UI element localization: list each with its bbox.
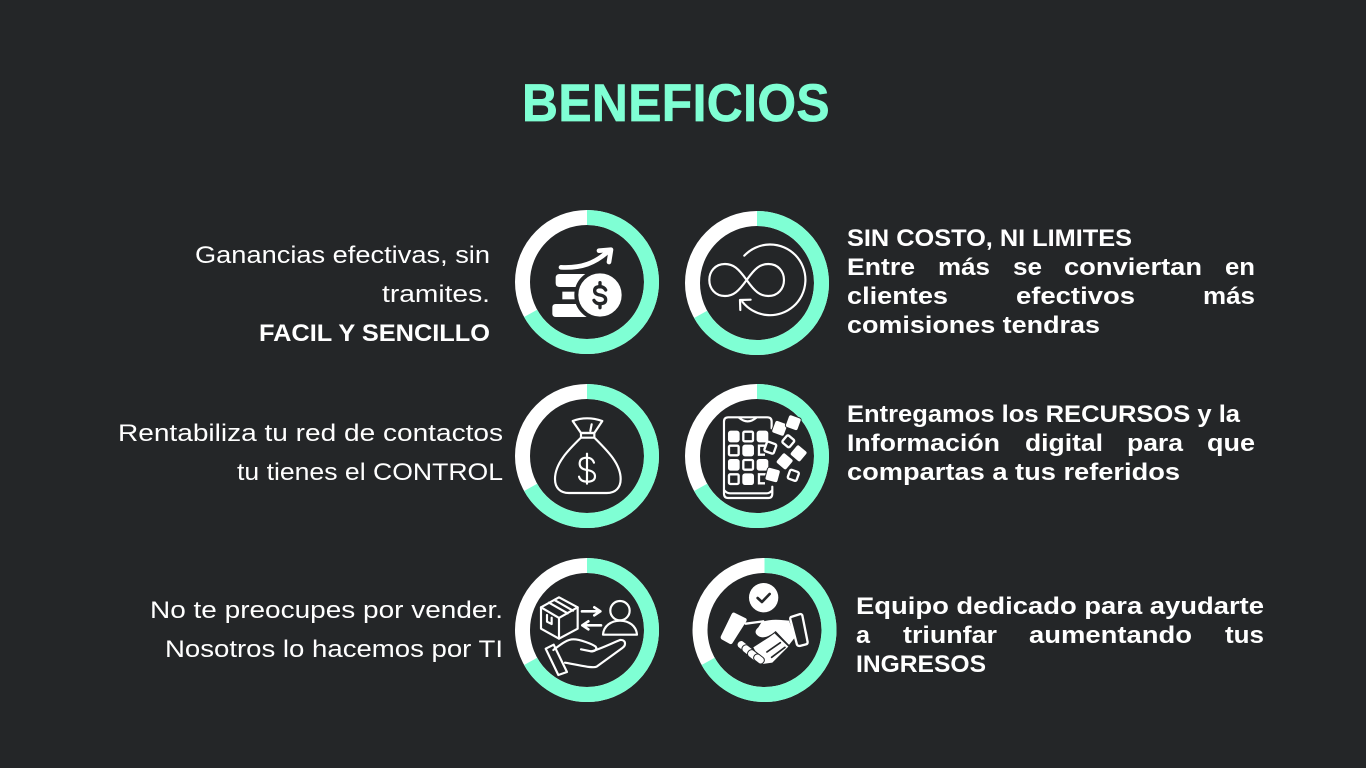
text: sin costo: en [1225, 254, 1255, 281]
text: rentabiliza: tu tienes el CONTROL [237, 459, 503, 486]
text: equipo: aumentando [1029, 622, 1192, 649]
icon: handshake with check badge [721, 583, 808, 665]
text: sin costo: efectivos [1016, 283, 1135, 310]
text: recursos: Entregamos los RECURSOS y la [847, 401, 1241, 428]
panel: no te preocupes [150, 566, 652, 694]
ring: progress 3 [522, 392, 652, 520]
text: equipo: triunfar [903, 622, 997, 649]
ring: progress 5 [522, 566, 652, 694]
ring: progress 2 [692, 218, 822, 348]
panel: ganancias efectivas [195, 218, 652, 347]
text: equipo: a [856, 622, 871, 649]
panel: equipo dedicado [700, 566, 1264, 694]
icon: phone with app tiles [724, 414, 808, 498]
ring: progress 1 [522, 218, 652, 346]
text: equipo: Equipo dedicado para ayudarte [856, 593, 1264, 620]
text: equipo: tus [1225, 622, 1264, 649]
text: sin costo: conviertan [1064, 254, 1202, 281]
text: sin costo: clientes [847, 283, 948, 310]
icon: money bag [555, 418, 621, 493]
text: ganancias: tramites. [382, 281, 490, 308]
text: recursos: compartas a tus referidos [847, 459, 1180, 486]
text: sin costo [847, 225, 1255, 339]
text: vender: No te preocupes por vender. [150, 597, 503, 624]
icon: box, person and open hand [541, 597, 637, 675]
text: sin costo: SIN COSTO, NI LIMITES [847, 225, 1132, 252]
text: ganancias: FACIL Y SENCILLO [259, 320, 490, 347]
text: vender: Nosotros lo hacemos por TI [165, 636, 503, 663]
text: recursos [847, 401, 1255, 486]
text: recursos: que [1207, 430, 1255, 457]
icon: infinity with loop arrow [709, 244, 805, 315]
text: rentabiliza [118, 420, 503, 486]
panel: recursos [692, 392, 1255, 520]
text: sin costo: más [938, 254, 990, 281]
text: recursos: Información [847, 430, 1000, 457]
ring: progress 4 [692, 392, 822, 520]
text: recursos: digital [1025, 430, 1103, 457]
icon: coins with rising arrow [552, 250, 624, 319]
panel: sin costo [692, 218, 1255, 348]
text: recursos: para [1127, 430, 1184, 457]
panel: red de contactos [118, 392, 652, 520]
text: equipo: INGRESOS [856, 651, 986, 678]
text: sin costo: más [1203, 283, 1255, 310]
title: BENEFICIOS [522, 74, 830, 133]
text: rentabiliza: Rentabiliza tu red de contactos [118, 420, 503, 447]
text: ganancias: Ganancias efectivas, sin [195, 242, 490, 269]
text: equipo [856, 593, 1264, 678]
text: sin costo: Entre [847, 254, 915, 281]
text: sin costo: comisiones tendras [847, 312, 1100, 339]
text: ganancias [195, 242, 490, 347]
text: vender [150, 597, 503, 663]
text: sin costo: se [1013, 254, 1042, 281]
ring: progress 6 [700, 566, 829, 694]
